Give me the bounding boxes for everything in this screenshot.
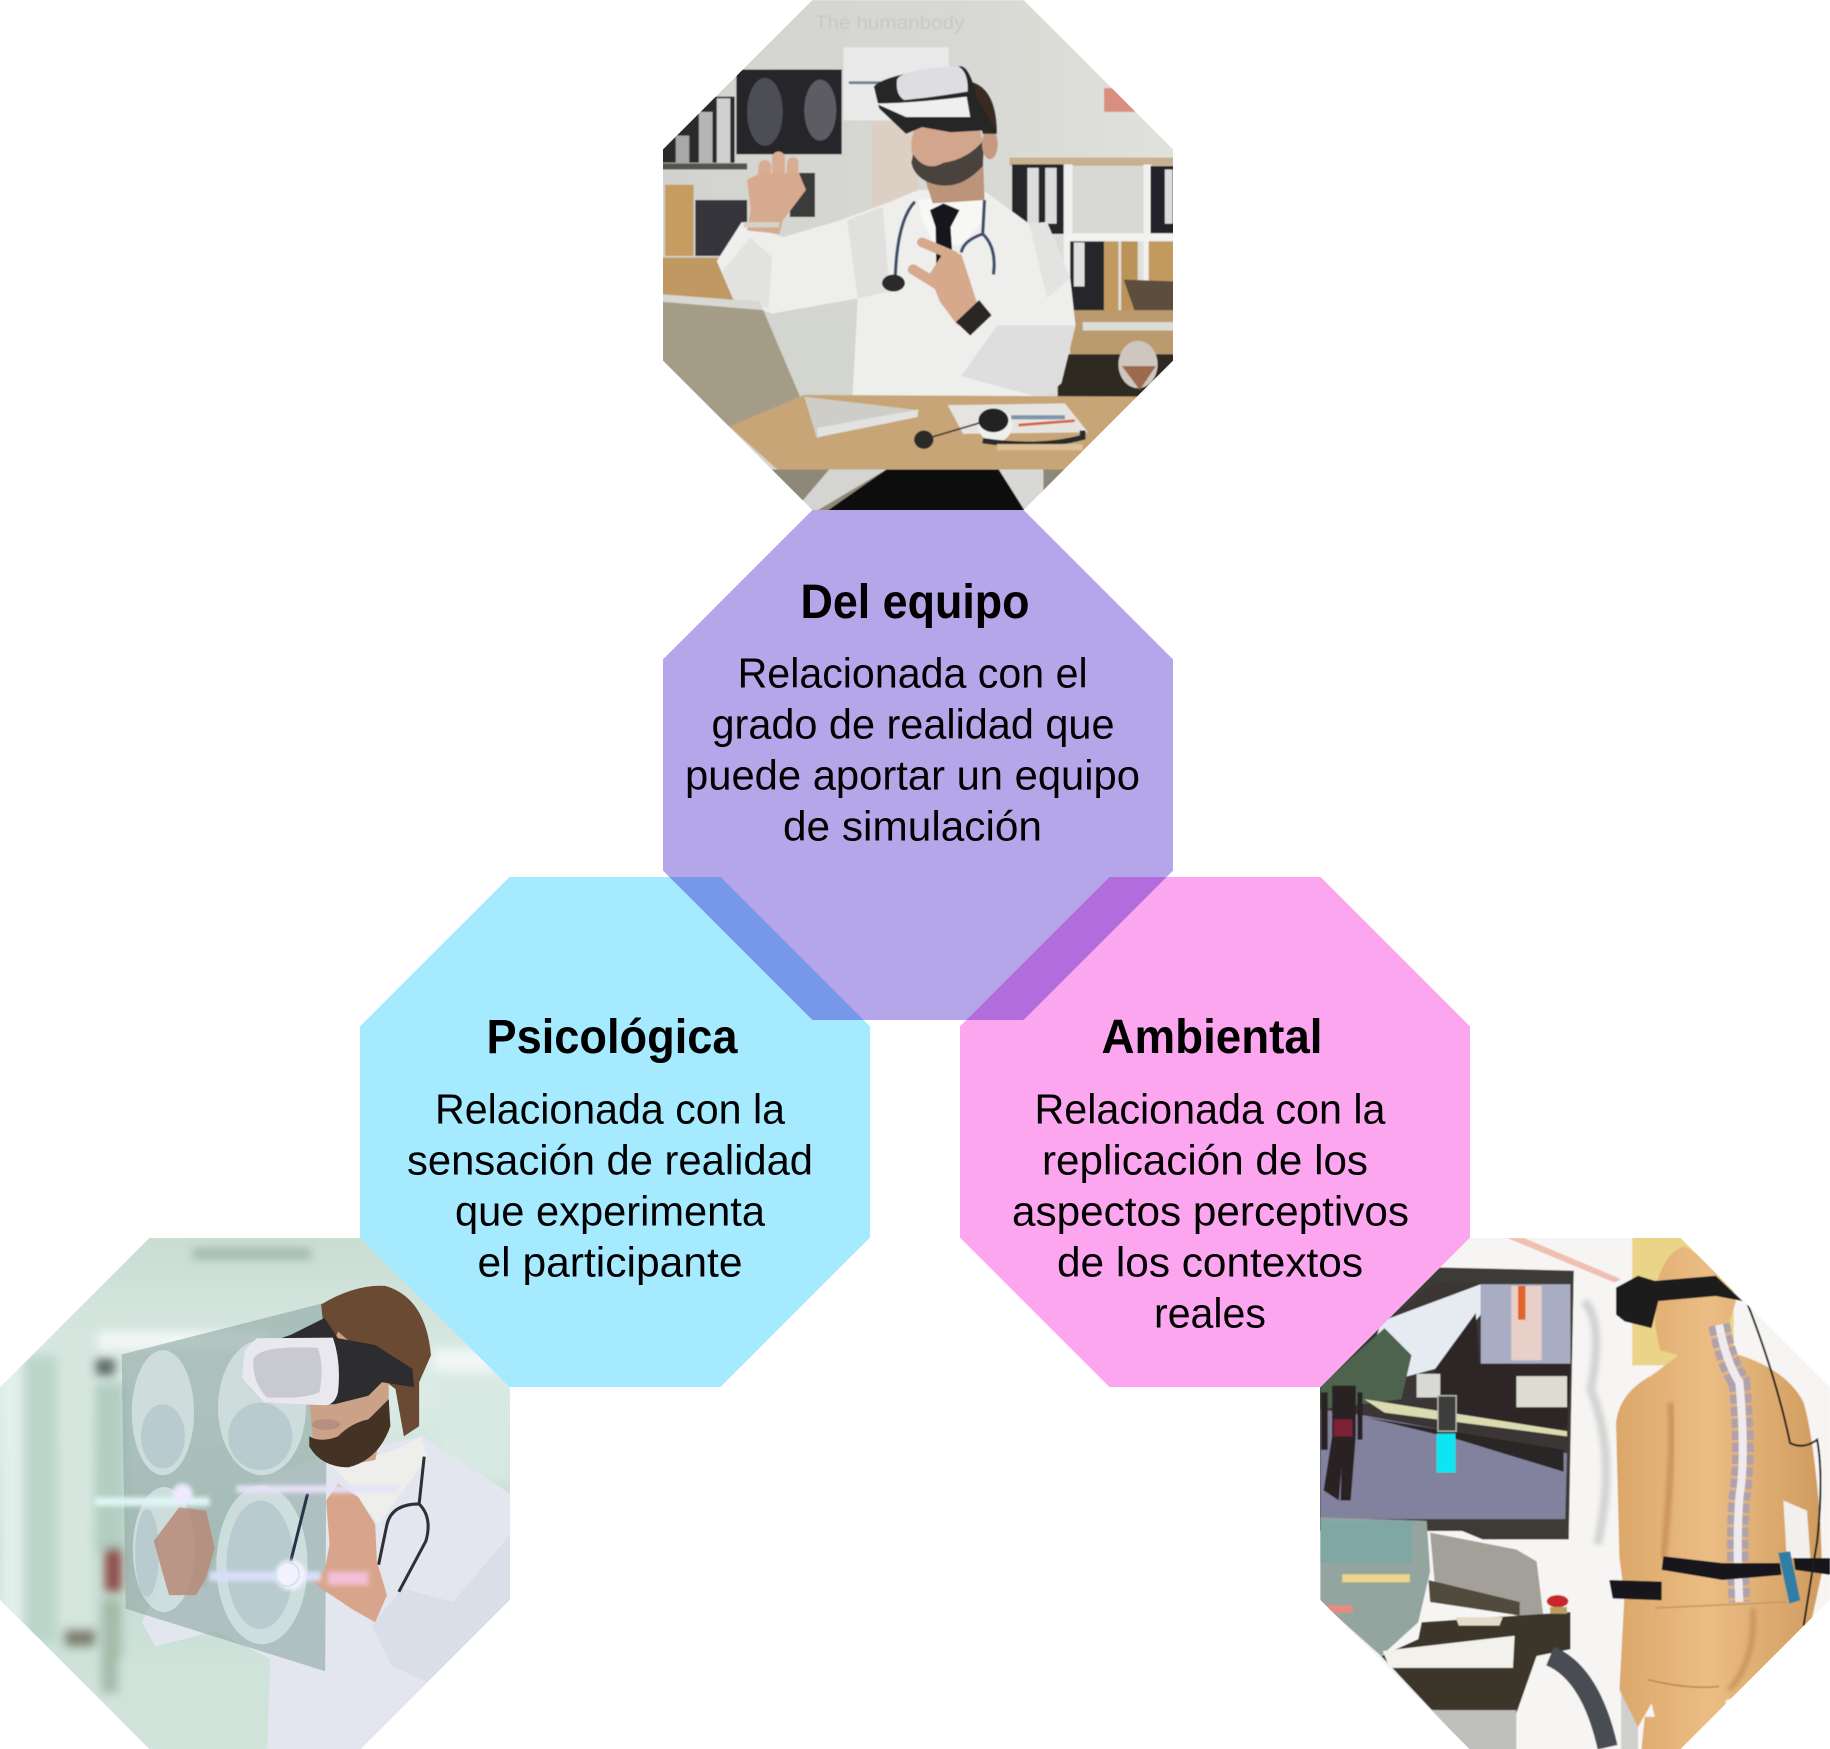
headset [1616,1276,1743,1328]
mannequin body [1616,1246,1822,1749]
neck and face [926,161,985,204]
photo: doctor with VR headset at a desk [640,0,1200,512]
text block: Del equipo description: Relacionada con el [738,650,1088,696]
doctor coat [142,1436,510,1749]
text block: Psicológica description: el participante [478,1238,742,1286]
below the table [772,468,1064,510]
hologram panel [122,1302,327,1671]
heading: Del equipo: Del equipo [800,576,1030,629]
text block: Psicológica description [407,1086,813,1286]
text block: Del equipo description: de simulación [783,802,1042,850]
lens flares [95,1484,399,1590]
stethoscope [895,200,994,278]
text block: Ambiental description: Relacionada con la [1034,1086,1386,1132]
coat [717,190,1076,398]
text block: Del equipo description: puede aportar un equipo [685,752,1140,798]
face and beard [309,1332,389,1467]
hands [154,1507,215,1595]
text block: Psicológica description: sensación de realidad [407,1136,813,1184]
text block: Del equipo description: grado de realidad que [712,700,1114,748]
text block: Ambiental description: aspectos perceptivos [1012,1188,1409,1234]
panel: Ambiental [960,877,1470,1387]
text block: Psicológica description: Relacionada con la [435,1086,786,1132]
right shelf [1009,158,1200,166]
laptop lid [663,302,800,427]
panel: Psicológica [360,877,870,1387]
monitor [1300,1267,1574,1539]
wire [1748,1304,1821,1626]
spine [1719,1325,1743,1602]
text block: Psicológica description: que experimenta [455,1188,766,1234]
text block: Del equipo description [685,650,1140,850]
text block: Ambiental description [1012,1086,1409,1336]
text block: Ambiental description: replicación de los [1042,1136,1368,1184]
lower background plant [776,312,858,400]
belts and straps [1662,1556,1782,1580]
photo: doctor with VR headset at a desk: The humanbody [815,12,965,34]
VR headset [874,66,997,134]
text block: Ambiental description: reales [1154,1290,1266,1336]
text block: Ambiental description: de los contextos [1057,1238,1363,1286]
tie [930,203,960,268]
heading: Ambiental: Ambiental [1102,1011,1322,1064]
hair [321,1286,431,1436]
second hand [913,242,954,288]
treadmill console [1320,1517,1430,1656]
panel: Del equipo [663,510,1173,1020]
raised hand [763,158,793,190]
hourglass [1118,341,1158,388]
table [729,395,1140,470]
photo: doctor using holographic brain scans [0,1237,514,1749]
photo: VR mannequin with spine on a treadmill [1300,1237,1830,1749]
stethoscope [379,1457,428,1592]
VR headset [242,1318,414,1404]
heading: Psicológica: Psicológica [486,1011,738,1064]
